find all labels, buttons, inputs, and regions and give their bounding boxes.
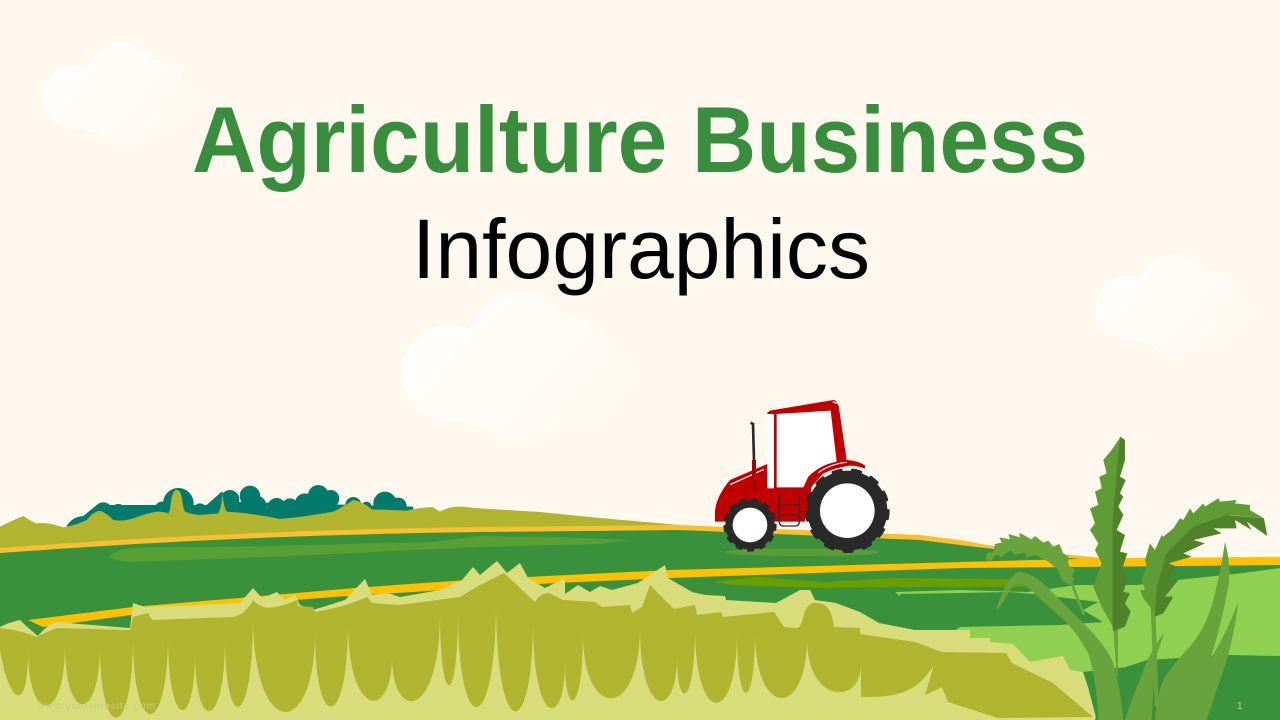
arched leaf — [996, 572, 1123, 720]
exhaust pipe — [751, 423, 754, 460]
engine highlight — [730, 402, 847, 485]
centre ear light side — [1090, 437, 1121, 631]
light green field strip — [108, 536, 630, 562]
ground shadow — [724, 548, 879, 556]
subtitle: Infographics — [412, 202, 870, 296]
small right leaf — [1187, 602, 1238, 720]
distant teal tree line — [66, 485, 413, 528]
cab door glass — [777, 411, 837, 487]
dark green furrow wedge — [900, 592, 1103, 640]
cloud: top right — [1096, 254, 1200, 340]
olive wheat blades — [0, 573, 1093, 718]
middle small leaf — [1125, 633, 1164, 720]
tractor body — [715, 400, 865, 522]
front yellow path — [28, 557, 1280, 627]
wheat plant — [985, 437, 1280, 720]
tractor — [715, 400, 888, 556]
front wheel — [725, 500, 775, 550]
left drooping ear — [985, 533, 1075, 585]
pale wheat field — [0, 561, 1097, 720]
cloud: centre — [402, 292, 558, 422]
bright green meadow — [895, 568, 1280, 680]
right ear light side — [1140, 498, 1264, 617]
cloud: top left — [43, 43, 146, 129]
rear yellow path — [0, 525, 1100, 561]
ladder — [779, 495, 799, 526]
tall right leaf — [1155, 542, 1229, 720]
right ear dark side — [1155, 515, 1267, 617]
centre ear dark side — [1113, 437, 1131, 631]
centre stem — [1113, 628, 1118, 677]
dark green field — [0, 527, 1280, 720]
olive crop band — [713, 577, 1033, 588]
left drooping ear stem — [1072, 583, 1084, 615]
rear wheel — [807, 470, 888, 551]
lower dark ground — [1084, 655, 1280, 720]
page number: 1 — [1237, 701, 1243, 712]
title: Agriculture Business — [192, 87, 1088, 192]
website footer: www.yourwebsite.com — [37, 701, 155, 712]
olive back hill — [0, 490, 730, 560]
cab windows — [767, 410, 838, 488]
right ear stem — [1151, 607, 1159, 707]
